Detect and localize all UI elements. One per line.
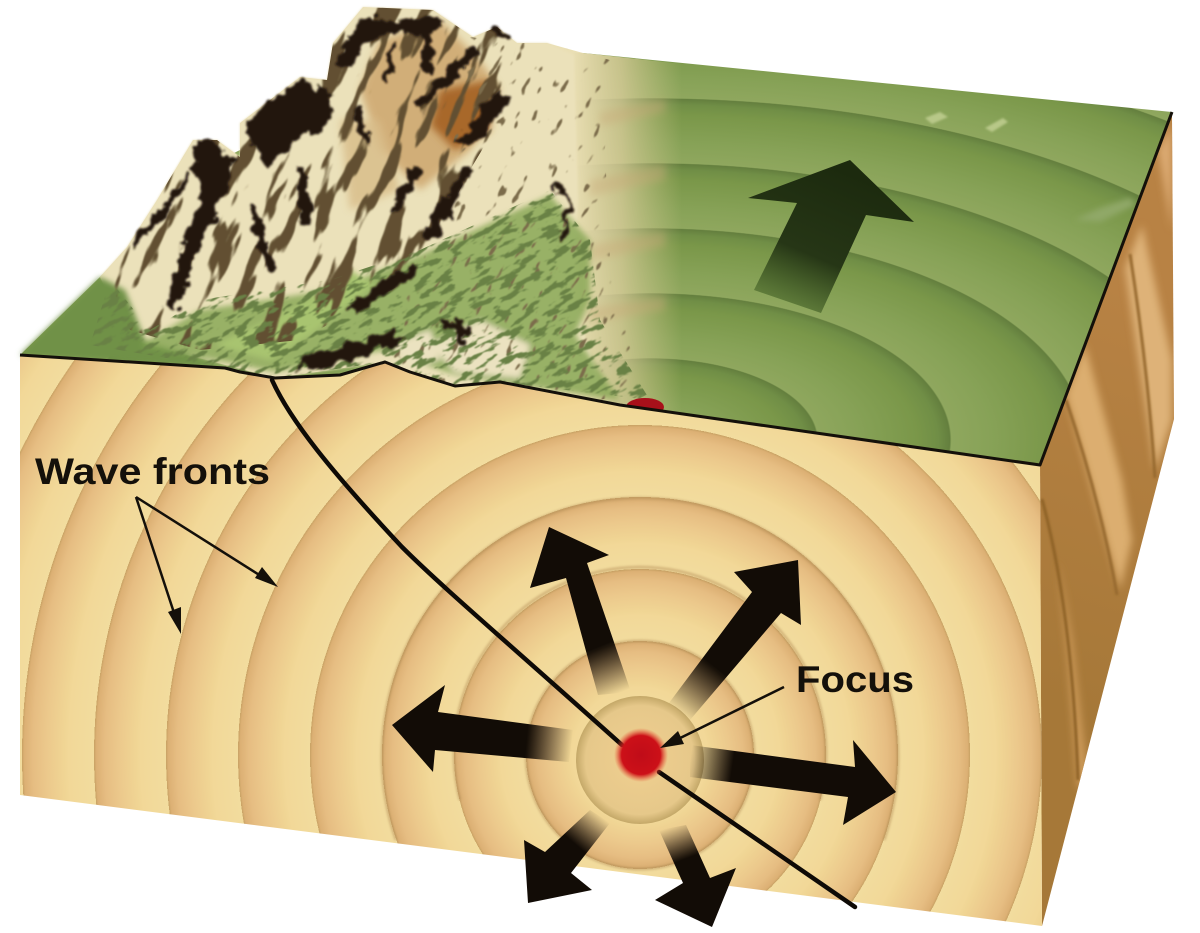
arrow: up-left [530,527,631,695]
focus core [576,696,704,824]
panel: top land surface [20,50,1172,465]
dark rock shadows [132,16,570,370]
fault line [272,380,855,907]
arrow: down-right [655,825,736,927]
tan wave bands through pale rock [590,100,665,322]
panel: mountain range [18,6,676,411]
icon: upward movement arrow on surface [748,160,914,313]
arrow: up-right [669,560,801,720]
label: Wave fronts: Wave fronts [35,451,270,492]
label: Focus: Focus [796,659,914,700]
icon: epicenter [626,398,664,416]
tan rock upper [360,20,500,190]
texture: vegetation flecks [93,191,646,398]
texture: rock streaks [114,8,502,350]
panel: front cross-section with wave fronts [20,355,1042,926]
icon: focus red point [614,728,668,782]
green lower slopes [20,195,620,400]
arrow: down-left [524,810,610,903]
panel: right side of block [1040,115,1174,926]
arrow: left [392,685,573,772]
arrow: right [690,740,896,825]
wave front pointer arrows [136,497,278,634]
texture: scattered streaks [394,37,630,400]
focus leader line [660,687,784,748]
surface outline [20,112,1172,465]
